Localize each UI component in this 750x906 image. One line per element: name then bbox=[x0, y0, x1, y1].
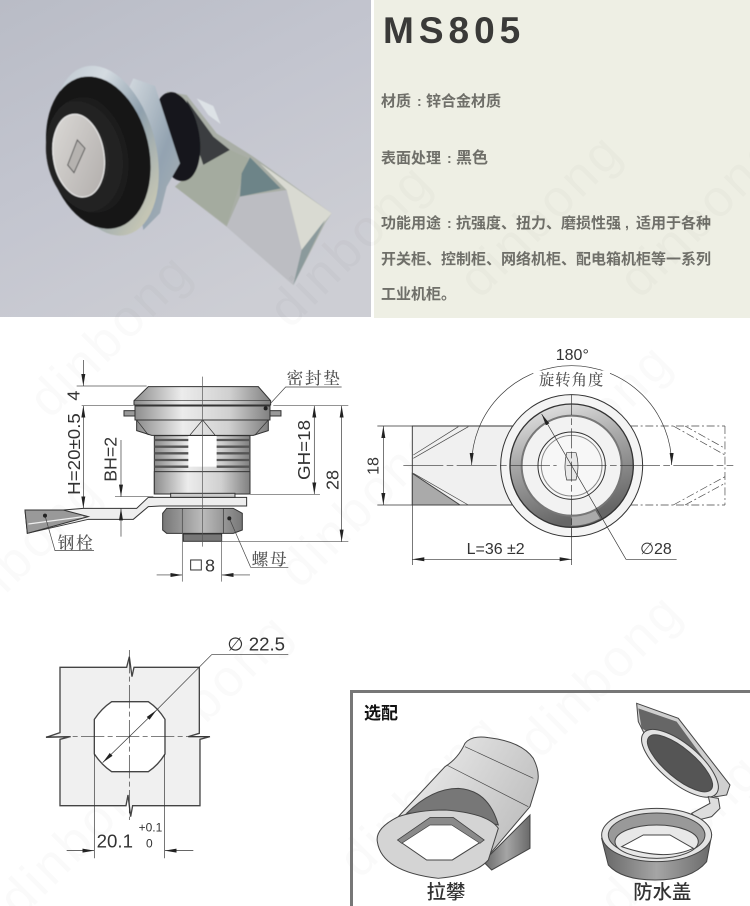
panel: optional accessories bbox=[352, 692, 750, 906]
accessory: waterproof cover bbox=[602, 703, 730, 880]
dimension labels: ∅ 22.5 bbox=[227, 634, 285, 655]
spec: function: 功能用途 bbox=[381, 214, 441, 232]
drawing: panel cut-out bbox=[46, 634, 288, 858]
dimension labels: 28 bbox=[322, 470, 342, 490]
dimension labels: BH=2 bbox=[101, 437, 121, 482]
lock body side view bbox=[25, 387, 281, 541]
callout: steel bolt: 钢栓 bbox=[58, 533, 94, 552]
dimension labels: L=36 ±2 bbox=[467, 541, 525, 558]
spec: material: : bbox=[417, 93, 422, 109]
dimension lines bbox=[377, 366, 733, 565]
dimension labels: 4 bbox=[63, 391, 83, 401]
dimension labels: H=20±0.5 bbox=[64, 413, 84, 495]
key cylinder cap bbox=[47, 111, 110, 201]
rubber cover bbox=[32, 66, 165, 239]
spec: function: 开关柜、控制柜、网络机柜、配电箱机柜等一系列 bbox=[381, 250, 711, 268]
dimension labels: 旋转角度 bbox=[539, 371, 604, 389]
callout: nut: 螺母 bbox=[252, 550, 288, 569]
spec: surface: 黑色 bbox=[456, 148, 488, 167]
dimension labels bbox=[63, 391, 342, 576]
dimension labels: ∅28 bbox=[640, 541, 672, 558]
callout: gasket bbox=[264, 369, 342, 410]
watermark: dinbong bbox=[257, 152, 444, 338]
lever arm bbox=[167, 92, 332, 285]
drawing: front view with rotation angle bbox=[365, 347, 733, 565]
panel: specifications bbox=[374, 0, 750, 318]
watermark: dinbong bbox=[117, 602, 304, 788]
watermark: dinbong bbox=[497, 332, 684, 518]
callout: nut bbox=[227, 516, 288, 569]
spec: function: 抗强度、扭力、磨损性强 bbox=[456, 214, 621, 232]
callout: gasket: 密封垫 bbox=[287, 369, 342, 388]
spec: function bbox=[381, 214, 711, 303]
label: pull handle: 拉攀 bbox=[427, 881, 465, 903]
heading: 选配 bbox=[364, 704, 398, 723]
dimension labels: 180° bbox=[556, 347, 589, 364]
drawing: side view with dimensions bbox=[25, 360, 348, 582]
photo: cam lock product bbox=[0, 0, 371, 317]
dimension labels: 20.1 bbox=[97, 830, 133, 851]
watermark: dinbong bbox=[327, 702, 514, 888]
dimension labels bbox=[365, 347, 672, 558]
lock face circles bbox=[501, 395, 643, 537]
spec: surface: 表面处理 bbox=[381, 149, 441, 167]
square hole bbox=[94, 702, 165, 772]
lever outline bbox=[412, 426, 725, 505]
spec: function: 工业机柜。 bbox=[381, 286, 456, 303]
dimension labels: 18 bbox=[365, 457, 382, 475]
watermark: dinbong bbox=[17, 242, 204, 428]
plate bbox=[46, 657, 210, 817]
back nut bbox=[197, 98, 221, 124]
rubber boot bbox=[147, 88, 207, 185]
dimension labels: 8 bbox=[205, 556, 215, 576]
watermark: dinbong bbox=[447, 122, 634, 308]
spec: material: 锌合金材质 bbox=[426, 92, 501, 110]
flange ring bbox=[37, 54, 175, 247]
title: MS805 bbox=[383, 10, 525, 51]
hex nut bbox=[123, 78, 180, 230]
spec: surface: : bbox=[447, 150, 452, 166]
callout: steel bolt bbox=[43, 514, 94, 552]
dimension labels: GH=18 bbox=[294, 420, 314, 480]
dimension lines bbox=[77, 360, 348, 582]
label: waterproof cover: 防水盖 bbox=[633, 881, 691, 903]
spec: function: , bbox=[625, 215, 629, 231]
accessory: pull handle bbox=[377, 737, 538, 878]
watermark: dinbong bbox=[267, 412, 454, 598]
dimension labels bbox=[97, 634, 285, 851]
dimension labels: 0 bbox=[146, 836, 153, 850]
spec: function: 适用于各种 bbox=[636, 214, 711, 232]
spec: function: : bbox=[447, 215, 452, 231]
dimension lines bbox=[46, 650, 288, 858]
dimension labels: +0.1 bbox=[139, 820, 163, 834]
spec: material: 材质 bbox=[381, 92, 411, 110]
watermark: dinbong bbox=[507, 582, 694, 768]
